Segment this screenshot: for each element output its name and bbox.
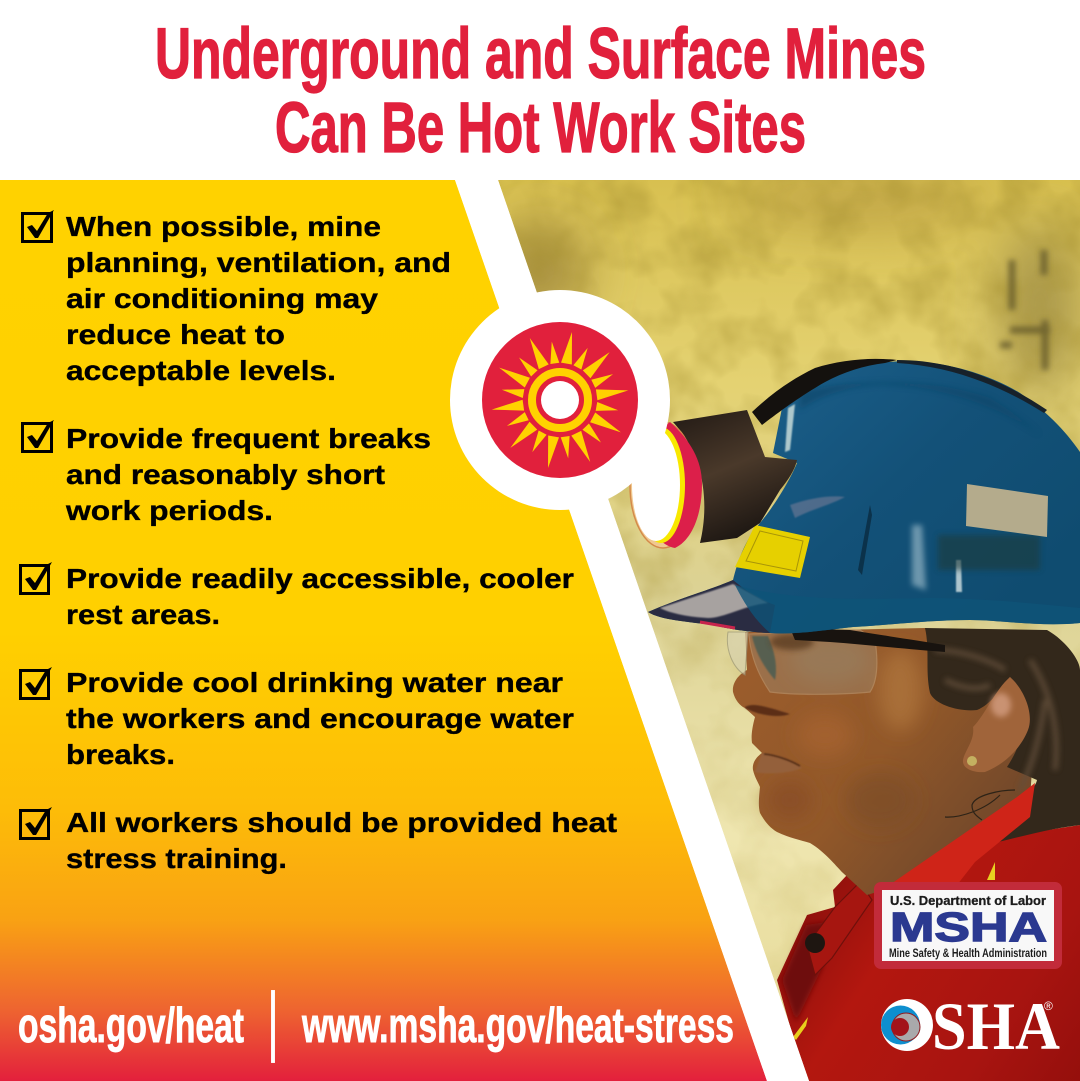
helmet	[648, 361, 1080, 633]
shirt	[777, 825, 1080, 1081]
text 2: and reasonably short	[66, 459, 385, 490]
sun centre	[541, 381, 579, 419]
background struts, upper right	[1000, 250, 1050, 370]
text 2: work periods.	[65, 495, 273, 526]
text 3	[66, 563, 574, 630]
MSHA logo: MSHA	[890, 904, 1047, 950]
safety glasses	[727, 630, 877, 694]
headlamp lens	[632, 429, 680, 541]
footer links: www.msha.gov/heat-stress	[301, 999, 734, 1053]
text 1: When possible, mine	[66, 211, 381, 242]
checkbox 3	[20, 562, 52, 594]
text 1: air conditioning may	[66, 283, 378, 314]
checkbox 4	[20, 667, 52, 698]
helmet shading and highlights	[648, 382, 1080, 633]
footer links: osha.gov/heat	[18, 999, 244, 1053]
face and neck	[733, 628, 1035, 895]
headlamp body	[673, 410, 797, 543]
photo: miner with helmet and headlamp	[480, 175, 1080, 1081]
sun rays	[491, 331, 629, 469]
headlamp red rim	[663, 422, 702, 548]
OSHA logo	[881, 988, 1060, 1064]
headlamp yellow glow	[654, 428, 685, 543]
checklist item 3	[20, 562, 574, 630]
text 3: Provide readily accessible, cooler	[66, 563, 574, 594]
glasses arm	[790, 628, 945, 652]
collar flap	[807, 882, 872, 975]
OSHA logo: ®	[1044, 999, 1053, 1013]
text 4: breaks.	[66, 739, 175, 770]
back helmet edge	[897, 360, 1047, 413]
yellow collar trim	[987, 862, 995, 880]
yellow sticker on helmet	[735, 525, 810, 578]
ear	[963, 677, 1030, 772]
text 5: stress training.	[66, 843, 287, 874]
MSHA logo: U.S. Department of Labor	[890, 894, 1046, 908]
reflective tape on helmet	[966, 484, 1048, 537]
hair	[925, 628, 1080, 845]
panel: yellow checklist background	[0, 180, 767, 1081]
text 4: Provide cool drinking water near	[66, 667, 563, 698]
checkbox 2	[22, 420, 54, 452]
shirt shadow	[782, 922, 826, 1022]
text 2	[65, 423, 431, 526]
text 1: acceptable levels.	[66, 355, 336, 386]
text 3: rest areas.	[66, 599, 220, 630]
OSHA logo: SHA	[932, 988, 1060, 1064]
hair wisps on neck	[945, 790, 1015, 820]
text 4	[66, 667, 574, 770]
MSHA logo	[874, 882, 1062, 969]
checklist item 1	[22, 210, 451, 386]
bright collar	[894, 783, 1035, 882]
nose shadow and lips	[745, 705, 802, 773]
sun ring	[532, 372, 588, 428]
emblem white ring	[450, 290, 670, 510]
text 5	[66, 807, 617, 874]
text 5: All workers should be provided heat	[66, 807, 617, 838]
footer links	[18, 990, 734, 1062]
text 1: reduce heat to	[66, 319, 285, 350]
text 4: the workers and encourage water	[66, 703, 574, 734]
title: Can Be Hot Work Sites	[275, 89, 806, 168]
text 1: planning, ventilation, and	[66, 247, 451, 278]
text 1	[66, 211, 451, 386]
emblem red disc	[482, 322, 638, 478]
headlamp strap	[752, 359, 897, 425]
text 2: Provide frequent breaks	[66, 423, 431, 454]
checklist item 5	[20, 807, 617, 874]
checkbox 5	[20, 807, 52, 838]
sun emblem	[450, 290, 670, 510]
earring	[967, 756, 977, 766]
OSHA ring mark	[881, 999, 933, 1051]
yellow shirt trim	[793, 1017, 808, 1040]
checklist item 2	[22, 420, 431, 526]
checkbox 1	[22, 210, 54, 242]
headlamp lens outer ring	[630, 422, 696, 548]
checklist item 4	[20, 667, 574, 770]
title	[155, 15, 926, 168]
shirt button	[805, 933, 825, 953]
white diagonal band	[455, 180, 809, 1081]
